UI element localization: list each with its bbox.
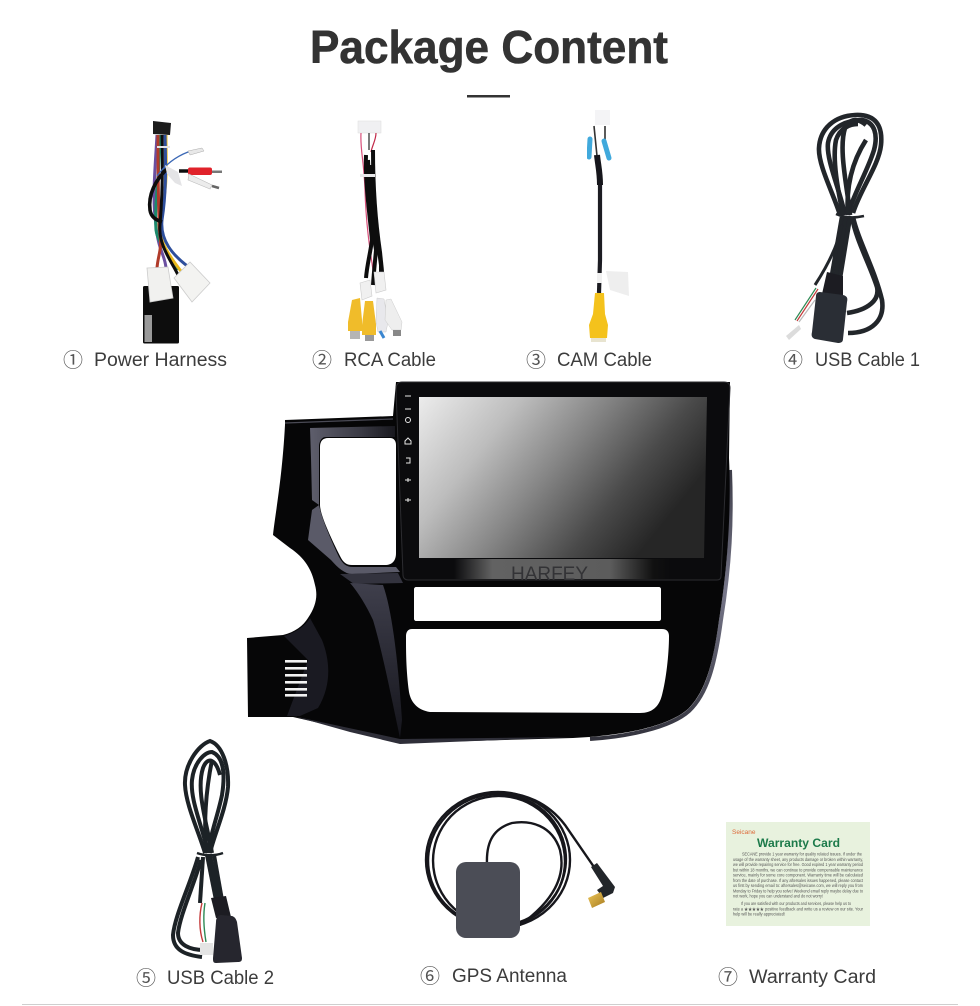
title: Package Content [310, 21, 668, 73]
title underline [467, 95, 510, 98]
label 1: ① [63, 344, 83, 373]
bottom divider [22, 1004, 958, 1005]
item 4: usb cable 1 [786, 115, 882, 343]
gloss center sweep [350, 583, 402, 738]
card body text: from the date of purchase. If any aftersales issues happened, please contact [733, 878, 864, 883]
usb plug [213, 915, 242, 963]
gloss lower left wedge [284, 618, 328, 716]
label 2: RCA Cable [344, 350, 436, 371]
head unit bezel [396, 382, 730, 580]
label 3 [526, 344, 652, 373]
harness tags [157, 146, 182, 186]
antenna coiled cable [419, 785, 594, 936]
rca white sleeves [360, 272, 386, 300]
rca cable tie [360, 174, 375, 177]
label 5 [136, 962, 274, 991]
cam white tie [597, 273, 602, 283]
white rca connector 1 [376, 298, 388, 338]
vent slots [285, 660, 307, 697]
label 5: ⑤ [136, 962, 156, 991]
item 6: gps antenna [419, 785, 615, 938]
label 2: ② [312, 344, 332, 373]
usb loop cables [815, 115, 882, 333]
yellow rca connector [589, 293, 608, 338]
rca thin wires [361, 133, 376, 270]
label 3: CAM Cable [557, 350, 652, 371]
label 1: Power Harness [94, 350, 227, 371]
yellow rca connector 1 [348, 298, 362, 339]
brand logo: HARFEY [511, 564, 588, 585]
card heading: Warranty Card [757, 838, 840, 850]
usb strain relief [822, 272, 843, 298]
usb loop cables [173, 741, 228, 957]
rca black cables [366, 150, 382, 285]
yellow rca connector 2 [362, 301, 376, 341]
bottom trim strip [293, 716, 573, 744]
card body text: If you are satisfied with our products and services, please help us to [741, 901, 852, 906]
card body text: SECANE provide 1 year warranty for quality related issues. If under the [742, 852, 863, 856]
harness spade terminal [188, 148, 204, 155]
white connector right [174, 262, 210, 302]
item 7: warranty card [726, 822, 870, 926]
label 7 [718, 961, 876, 990]
usb cable band [197, 853, 223, 855]
gloss under window [340, 573, 403, 584]
label 4: USB Cable 1 [815, 350, 920, 371]
gloss lower left of window [308, 505, 400, 574]
card body text: but within 18 months, we can continue to provide compensable maintenance [733, 867, 864, 872]
small white connector [200, 943, 213, 955]
usb plug [812, 292, 847, 343]
card body text: help will be really appreciated! [733, 912, 785, 916]
item 2: rca cable [348, 121, 402, 341]
label 4 [783, 344, 920, 373]
usb cable band [836, 214, 864, 217]
card background [726, 822, 870, 926]
usb colored wires [200, 903, 206, 942]
blue sleeves [589, 139, 609, 158]
card body text: us first by sending email to: aftersales@seicane.com, we will reply you from [733, 883, 863, 888]
card body text: Monday to Friday to help you solve! Weekend email reply maybe delay due to [733, 888, 864, 893]
label 6 [420, 960, 567, 989]
label 4: ④ [783, 344, 803, 373]
small white connector [786, 325, 801, 340]
rca ring [591, 338, 606, 342]
display screen [419, 397, 707, 558]
card body text [733, 852, 864, 916]
side buttons [405, 396, 411, 502]
black control box [143, 286, 179, 344]
rca top connector [358, 121, 381, 133]
card brand: Seicane [732, 829, 756, 836]
label 5: USB Cable 2 [167, 968, 274, 989]
box barcode label [144, 315, 152, 342]
white connector left [147, 267, 173, 302]
card body text: rate a ★★★★★ positive feedback and write us a review on our site. Your [733, 906, 864, 911]
usb colored wires [795, 288, 818, 322]
card body text: not work, hope you can understand and do not worry! [733, 894, 823, 898]
label 7: Warranty Card [749, 967, 876, 988]
chin reflection [430, 559, 670, 579]
top trim line [285, 419, 393, 423]
dash frame [247, 382, 730, 743]
harness wire bundle [150, 135, 200, 275]
usb strain relief [211, 896, 231, 918]
antenna module [456, 862, 520, 938]
gloss top of window [310, 426, 395, 505]
harness top connector [153, 121, 171, 135]
item 5: usb cable 2 [173, 741, 242, 963]
item 3: cam cable [589, 110, 629, 342]
cam top connector [595, 110, 610, 125]
cam thin black cable [599, 185, 600, 293]
label 6: GPS Antenna [452, 966, 567, 987]
item 1: power harness [143, 121, 222, 344]
label 3: ③ [526, 344, 546, 373]
card body text: usage of the warranty sheet, any products damage or broken within warranty, [733, 857, 863, 862]
right edge highlight [590, 470, 731, 739]
label 6: ⑥ [420, 960, 440, 989]
label 1 [63, 344, 227, 373]
sma right-angle connector [591, 863, 615, 898]
cam black cable [597, 155, 600, 185]
label 7: ⑦ [718, 961, 738, 990]
white rca plug [188, 174, 219, 189]
cam inner wires [594, 126, 605, 156]
sma gold tip [588, 892, 605, 908]
card body text: service, mainly for some core component. Warranty time will be calculated [733, 872, 864, 878]
red rca plug [179, 168, 222, 175]
label 2 [312, 344, 436, 373]
white rca connector 2 [385, 299, 402, 336]
cam tag [606, 271, 629, 296]
central unit: radio panel [247, 382, 731, 744]
card body text: we will provide repairing service for free. Good expired 1 year warranty period [733, 862, 864, 867]
